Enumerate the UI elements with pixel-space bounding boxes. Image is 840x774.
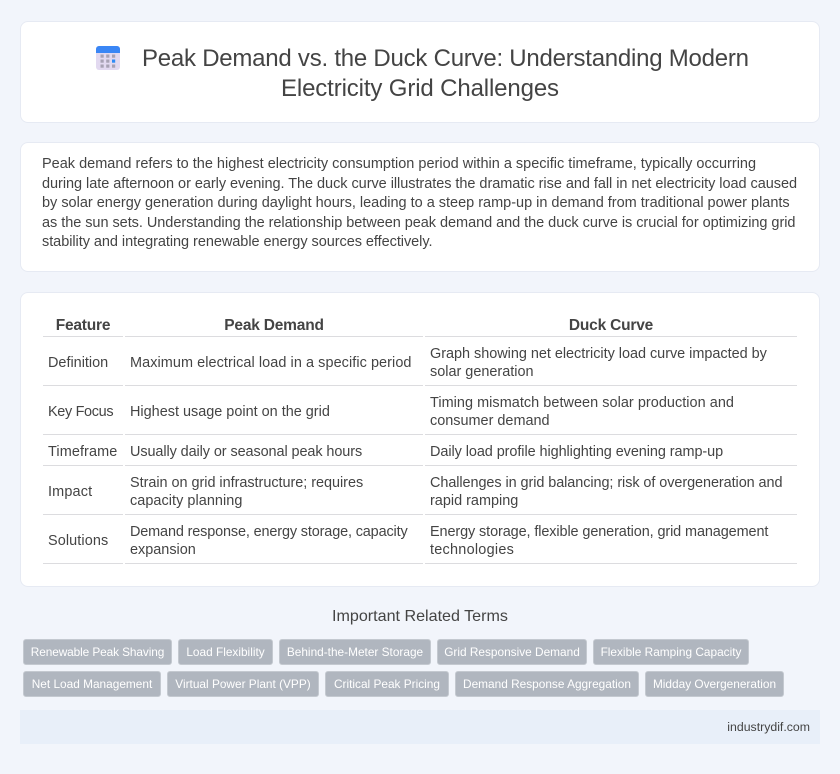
introduction text: stability and integrating renewable energy sources effectively. (42, 234, 432, 250)
row: key focus: consumer demand (430, 413, 550, 429)
introduction text: during late afternoon or early evening. The duck curve illustrates the dramatic rise and fall in net electricity load caused (42, 176, 797, 192)
row: definition (48, 346, 767, 380)
row: impact (48, 475, 782, 509)
introduction text (42, 156, 797, 250)
introduction text: Peak demand refers to the highest electricity consumption period within a specific timeframe, typically occurring (42, 156, 756, 172)
header panel (20, 21, 820, 123)
introduction text: by solar energy generation during daylight hours, leading to a steep ramp-up in demand from traditional power plants (42, 195, 790, 211)
row: solutions: technologies (430, 542, 514, 558)
row: timeframe (48, 444, 723, 460)
related term chips: Grid Responsive Demand (444, 645, 580, 659)
table header row: Feature (56, 317, 110, 334)
title (142, 45, 749, 102)
related term chips: Flexible Ramping Capacity (601, 645, 741, 659)
related term chips: Renewable Peak Shaving (31, 645, 164, 659)
related term chips: Demand Response Aggregation (463, 677, 631, 691)
related term chips: Critical Peak Pricing (334, 677, 440, 691)
row: impact: capacity planning (130, 493, 242, 509)
heading: related terms: Important Related Terms (332, 607, 508, 625)
related term chips (23, 639, 784, 697)
panel: introduction (20, 142, 820, 272)
panel: comparison table (20, 292, 820, 587)
introduction text: as the sun sets. Understanding the relationship between peak demand and the duck curve is crucial for optimizing grid (42, 214, 795, 230)
related term chips: Midday Overgeneration (653, 677, 776, 691)
text: Peak Demand vs. the Duck Curve: Understanding Modern (142, 45, 749, 72)
row: key focus: Key Focus (48, 404, 113, 420)
row: key focus: Timing mismatch between solar production and (430, 395, 734, 411)
icon: calendar grid (96, 46, 120, 70)
row: timeframe: Daily load profile highlighting evening ramp-up (430, 444, 723, 460)
row: impact: rapid ramping (430, 493, 518, 509)
row: solutions: Demand response, energy storage, capacity (130, 524, 408, 540)
row: timeframe: Usually daily or seasonal peak hours (130, 444, 362, 460)
related term chips: Behind-the-Meter Storage (287, 645, 423, 659)
row: definition: Graph showing net electricity load curve impacted by (430, 346, 767, 362)
footer source: industrydif.com (727, 720, 810, 734)
row: solutions: Energy storage, flexible generation, grid management (430, 524, 768, 540)
row: definition: Maximum electrical load in a specific period (130, 355, 412, 371)
text: Electricity Grid Challenges (281, 75, 559, 102)
table header row: Peak Demand (224, 317, 324, 334)
footer bar (20, 710, 820, 744)
related term chips: Load Flexibility (186, 645, 265, 659)
row: impact: Challenges in grid balancing; risk of overgeneration and (430, 475, 782, 491)
table header row (56, 317, 653, 334)
related term chips: Net Load Management (32, 677, 152, 691)
table header row: Duck Curve (569, 317, 653, 334)
row: definition: solar generation (430, 364, 534, 380)
row: key focus (48, 395, 734, 429)
row: impact: Impact (48, 484, 92, 500)
related term chips: Virtual Power Plant (VPP) (175, 677, 311, 691)
row: solutions (48, 524, 768, 558)
row: definition: Definition (48, 355, 108, 371)
row: solutions: expansion (130, 542, 196, 558)
row: timeframe: Timeframe (48, 444, 117, 460)
row: key focus: Highest usage point on the grid (130, 404, 330, 420)
row: impact: Strain on grid infrastructure; requires (130, 475, 363, 491)
row: solutions: Solutions (48, 533, 108, 549)
